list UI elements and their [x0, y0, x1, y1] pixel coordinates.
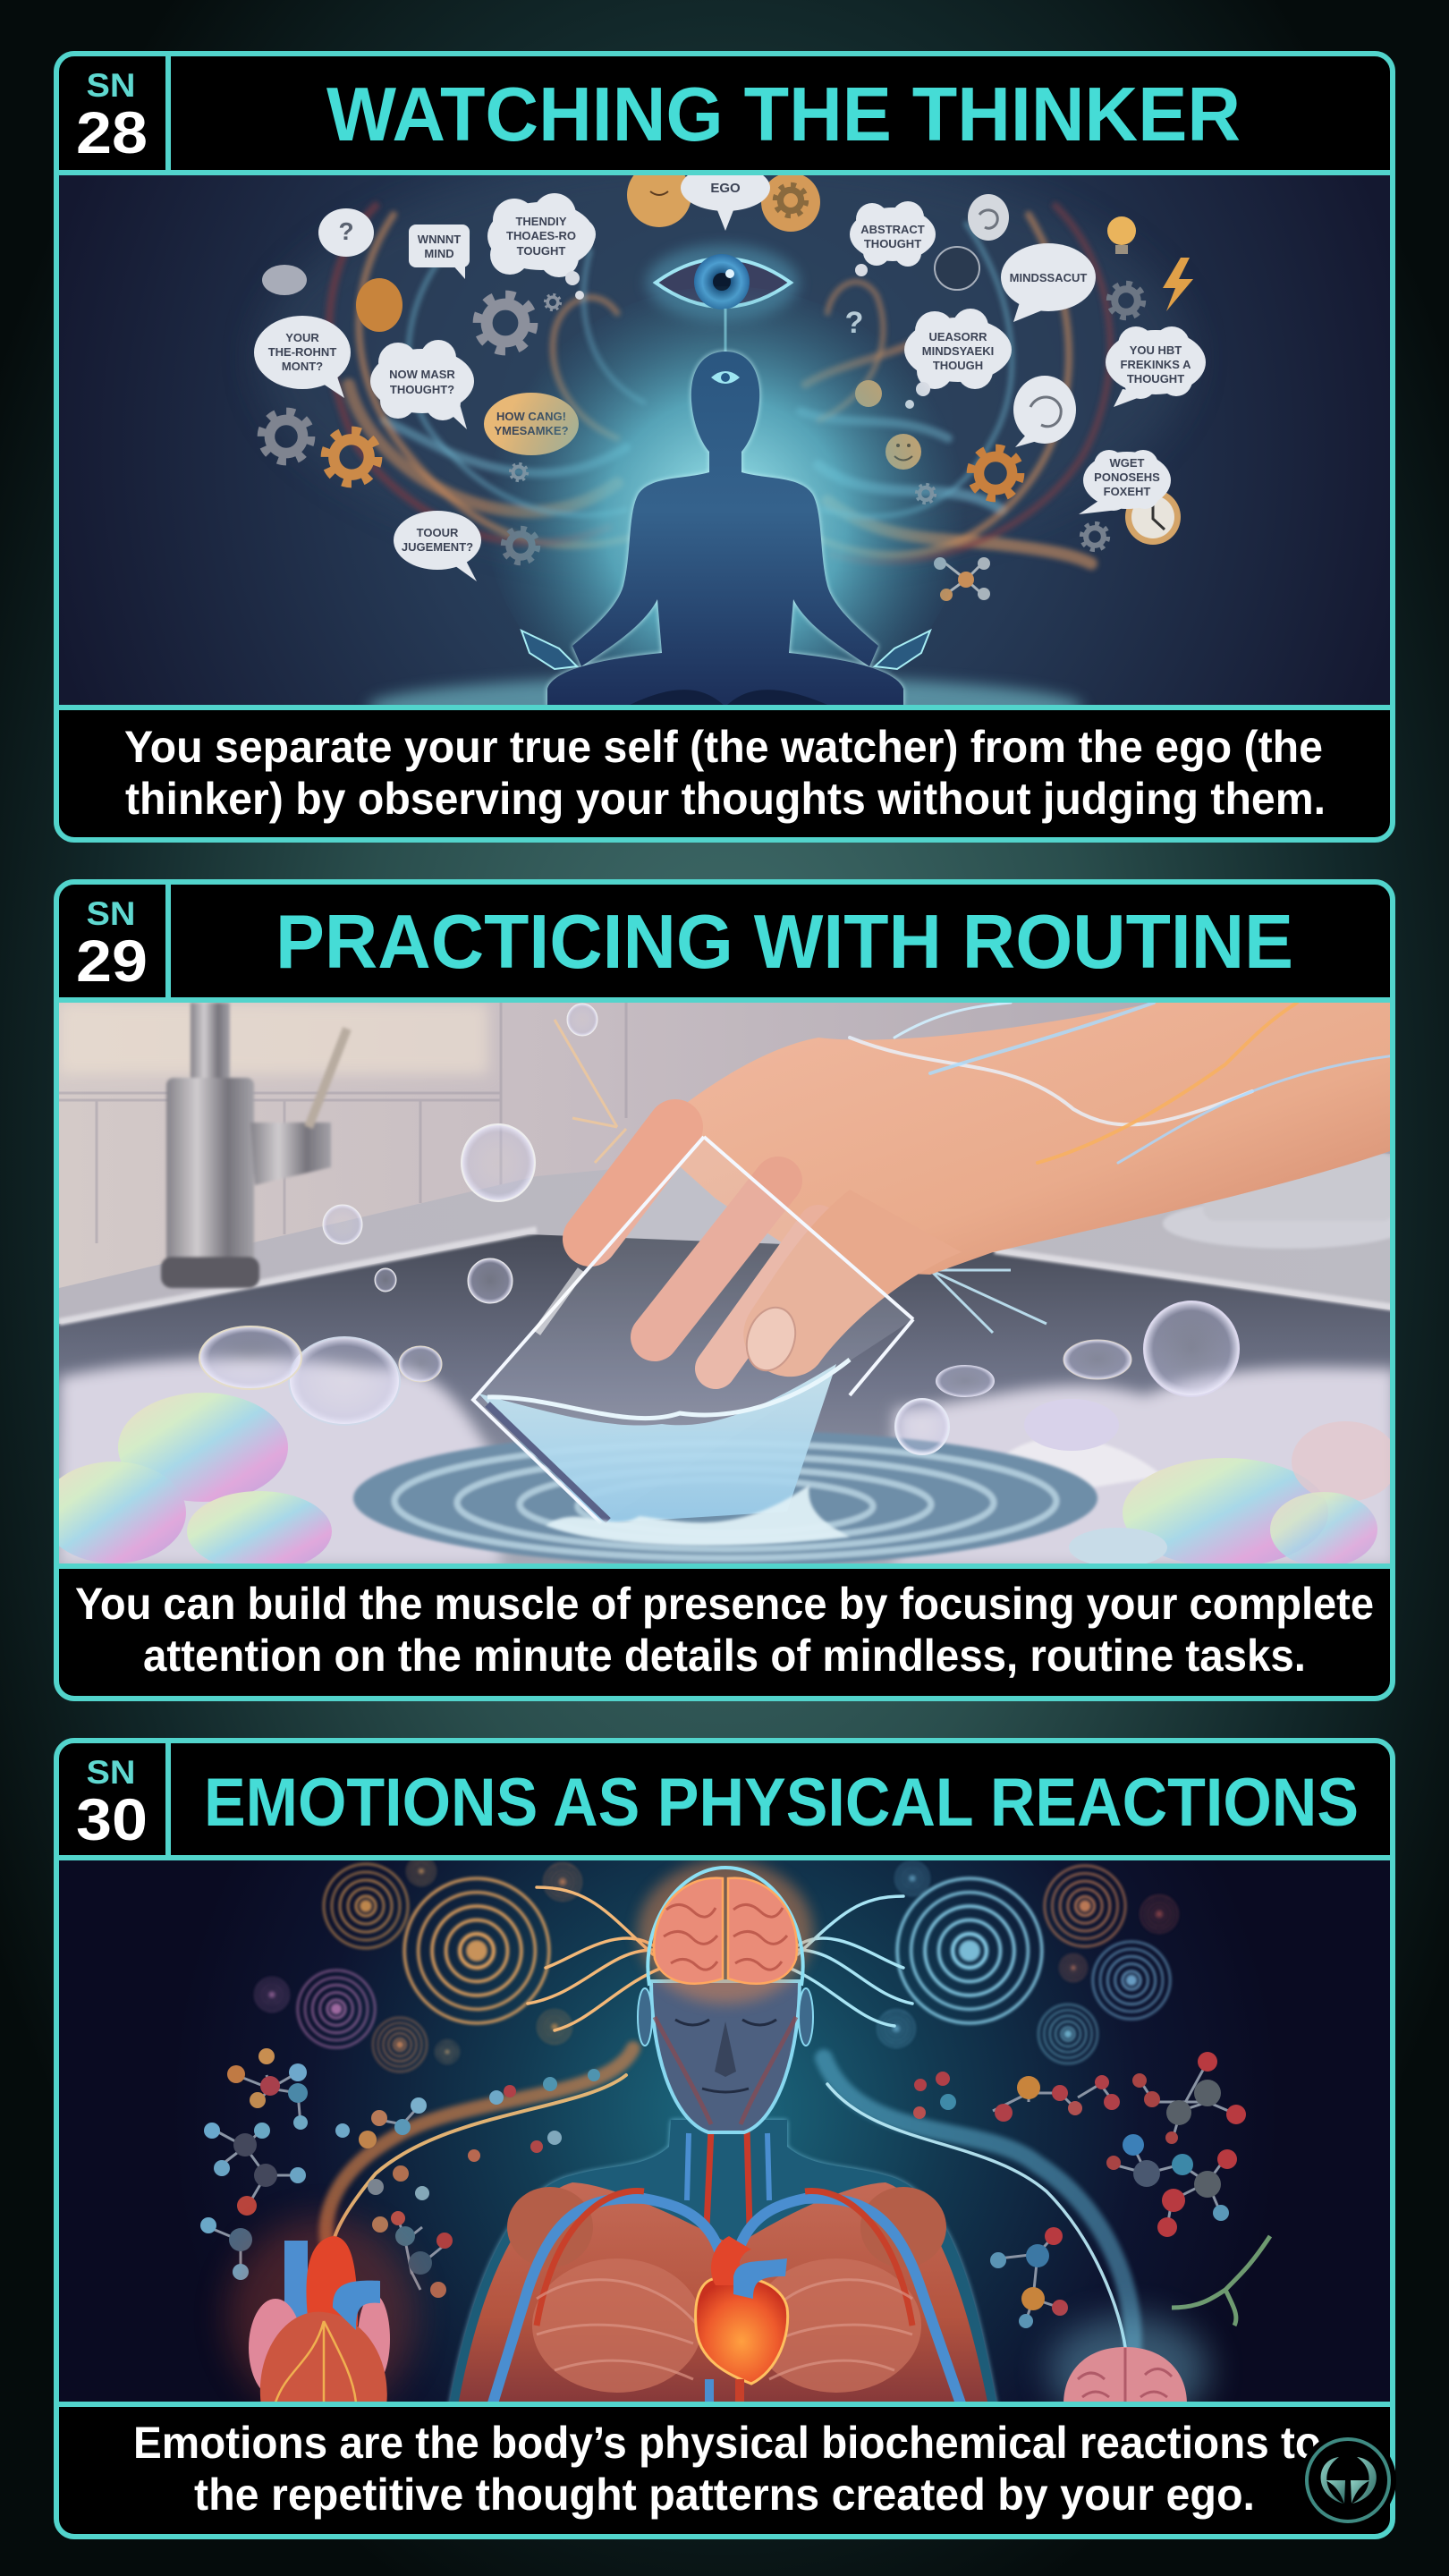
- header: SN 29 badge: 29: [76, 928, 148, 994]
- hand: [590, 1003, 1395, 1377]
- counter and sink: [59, 1154, 1395, 1342]
- thought bubbles: THE-ROHNT: [268, 345, 336, 359]
- thought bubbles: ?: [338, 217, 354, 245]
- icon: gears: [261, 284, 1143, 563]
- swirls: [329, 206, 1110, 564]
- molecules: [208, 2062, 1239, 2321]
- thought bubbles: YOU HBT: [1130, 343, 1182, 357]
- thought bubbles: THOAES-RO: [506, 229, 576, 242]
- thought bubbles: FOXEHT: [1104, 485, 1150, 498]
- thought bubbles: WGET: [1109, 456, 1145, 470]
- thought bubbles: THOUGHT?: [390, 383, 454, 396]
- header: SN 30 badge: 30: [76, 1786, 148, 1852]
- caption: thinker) by observing your thoughts without judging them.: [125, 774, 1326, 824]
- icon: clock: [1125, 489, 1181, 545]
- thought bubbles: MIND: [424, 247, 454, 260]
- thought bubbles: JUGEMENT?: [402, 540, 473, 554]
- header: SN 29 badge: [76, 895, 148, 994]
- header: SN 28 badge: SN: [86, 67, 136, 104]
- header: SN 29 badge: SN: [86, 895, 136, 932]
- heading: EMOTIONS AS PHYSICAL REACTIONS: [204, 1765, 1359, 1841]
- faucet: [161, 1003, 347, 1288]
- thought bubbles: MINDSSACUT: [1010, 271, 1087, 284]
- thought bubbles: [254, 165, 1206, 581]
- thought bubbles: THOUGHT: [1127, 372, 1184, 386]
- thought bubbles: TOOUR: [417, 526, 459, 539]
- thought bubbles: YMESAMKE?: [494, 424, 569, 437]
- thought bubbles: ?: [845, 306, 863, 340]
- caption: Emotions are the body’s physical biochemical reactions to: [133, 2418, 1321, 2468]
- caption: You can build the muscle of presence by focusing your complete: [75, 1579, 1374, 1629]
- thought bubbles: YOUR: [285, 331, 319, 344]
- thought bubbles: TOUGHT: [517, 244, 565, 258]
- thought bubbles: MONT?: [282, 360, 323, 373]
- illustration: body with brain, heart and molecules: [59, 1857, 1390, 2424]
- panel: SN 29 practicing with routine: [41, 882, 1413, 1699]
- caption: [124, 722, 1326, 824]
- illustration: hand washing a glass in soapy water: [41, 1003, 1413, 1572]
- panel: SN 28 watching the thinker: [56, 54, 1393, 840]
- thought bubbles: THENDIY: [515, 215, 567, 228]
- water ripples: [353, 1430, 1097, 1566]
- cup and plate: [1163, 1154, 1413, 1249]
- heading: WATCHING THE THINKER: [326, 72, 1241, 157]
- thought bubbles: FREKINKS A: [1121, 358, 1191, 371]
- thought bubbles: MINDSYAEKI: [922, 344, 994, 358]
- meditating figure: [368, 286, 1083, 737]
- header: SN 28 badge: [76, 67, 148, 165]
- illustration: meditating figure with thought bubbles: [59, 152, 1390, 737]
- caption: attention on the minute details of mindless, routine tasks.: [143, 1631, 1306, 1681]
- thought bubbles: WNNNT: [418, 233, 461, 246]
- caption: You separate your true self (the watcher) from the ego (the: [124, 722, 1323, 772]
- splash: [546, 1485, 850, 1546]
- thought bubbles: NOW MASR: [389, 368, 455, 381]
- thought bubbles: HOW CANG!: [496, 410, 566, 423]
- caption: [75, 1579, 1374, 1681]
- brain-to-spiral wires: [528, 1887, 912, 2030]
- thought bubbles: THOUGHT: [864, 237, 921, 250]
- icon: watching eye: [647, 245, 799, 353]
- thought spirals: [255, 1857, 1178, 2072]
- header: SN 30 badge: SN: [86, 1754, 136, 1791]
- brain: [638, 1860, 813, 2004]
- icon: orange faces and badges: [356, 163, 921, 470]
- thought bubbles: ABSTRACT: [860, 223, 925, 236]
- icon: circular logo badge: [1300, 2432, 1396, 2529]
- caption: [133, 2418, 1321, 2520]
- icon: anatomical heart, left: [228, 2218, 416, 2415]
- central heart: [696, 2278, 788, 2384]
- thought bubbles: THOUGH: [933, 359, 983, 372]
- heading: PRACTICING WITH ROUTINE: [275, 900, 1293, 985]
- foam: [59, 1359, 501, 1566]
- hormone streams: [326, 2048, 1133, 2361]
- icon: light bulb and bolt: [1107, 216, 1193, 311]
- head: [651, 1981, 800, 2132]
- thought bubbles: PONOSEHS: [1094, 470, 1160, 484]
- icon: molecule: [934, 557, 990, 601]
- header: SN 30 badge: [76, 1754, 148, 1852]
- thought bubbles: UEASORR: [928, 330, 987, 343]
- panel: SN 30 emotions as physical reactions: [56, 1741, 1393, 2537]
- big iridescent bubbles: [41, 1004, 1399, 1572]
- glass: [473, 1137, 913, 1523]
- human figure: [449, 1860, 997, 2406]
- sparkle rays: [555, 1020, 626, 1163]
- header: SN 28 badge: 28: [76, 99, 148, 165]
- caption: the repetitive thought patterns created by your ego.: [194, 2470, 1255, 2520]
- chest and shoulder muscles: [458, 2182, 988, 2406]
- thought bubbles: EGO: [710, 181, 741, 196]
- veins: [492, 2199, 962, 2406]
- icon: brain, bottom right: [1048, 2317, 1209, 2424]
